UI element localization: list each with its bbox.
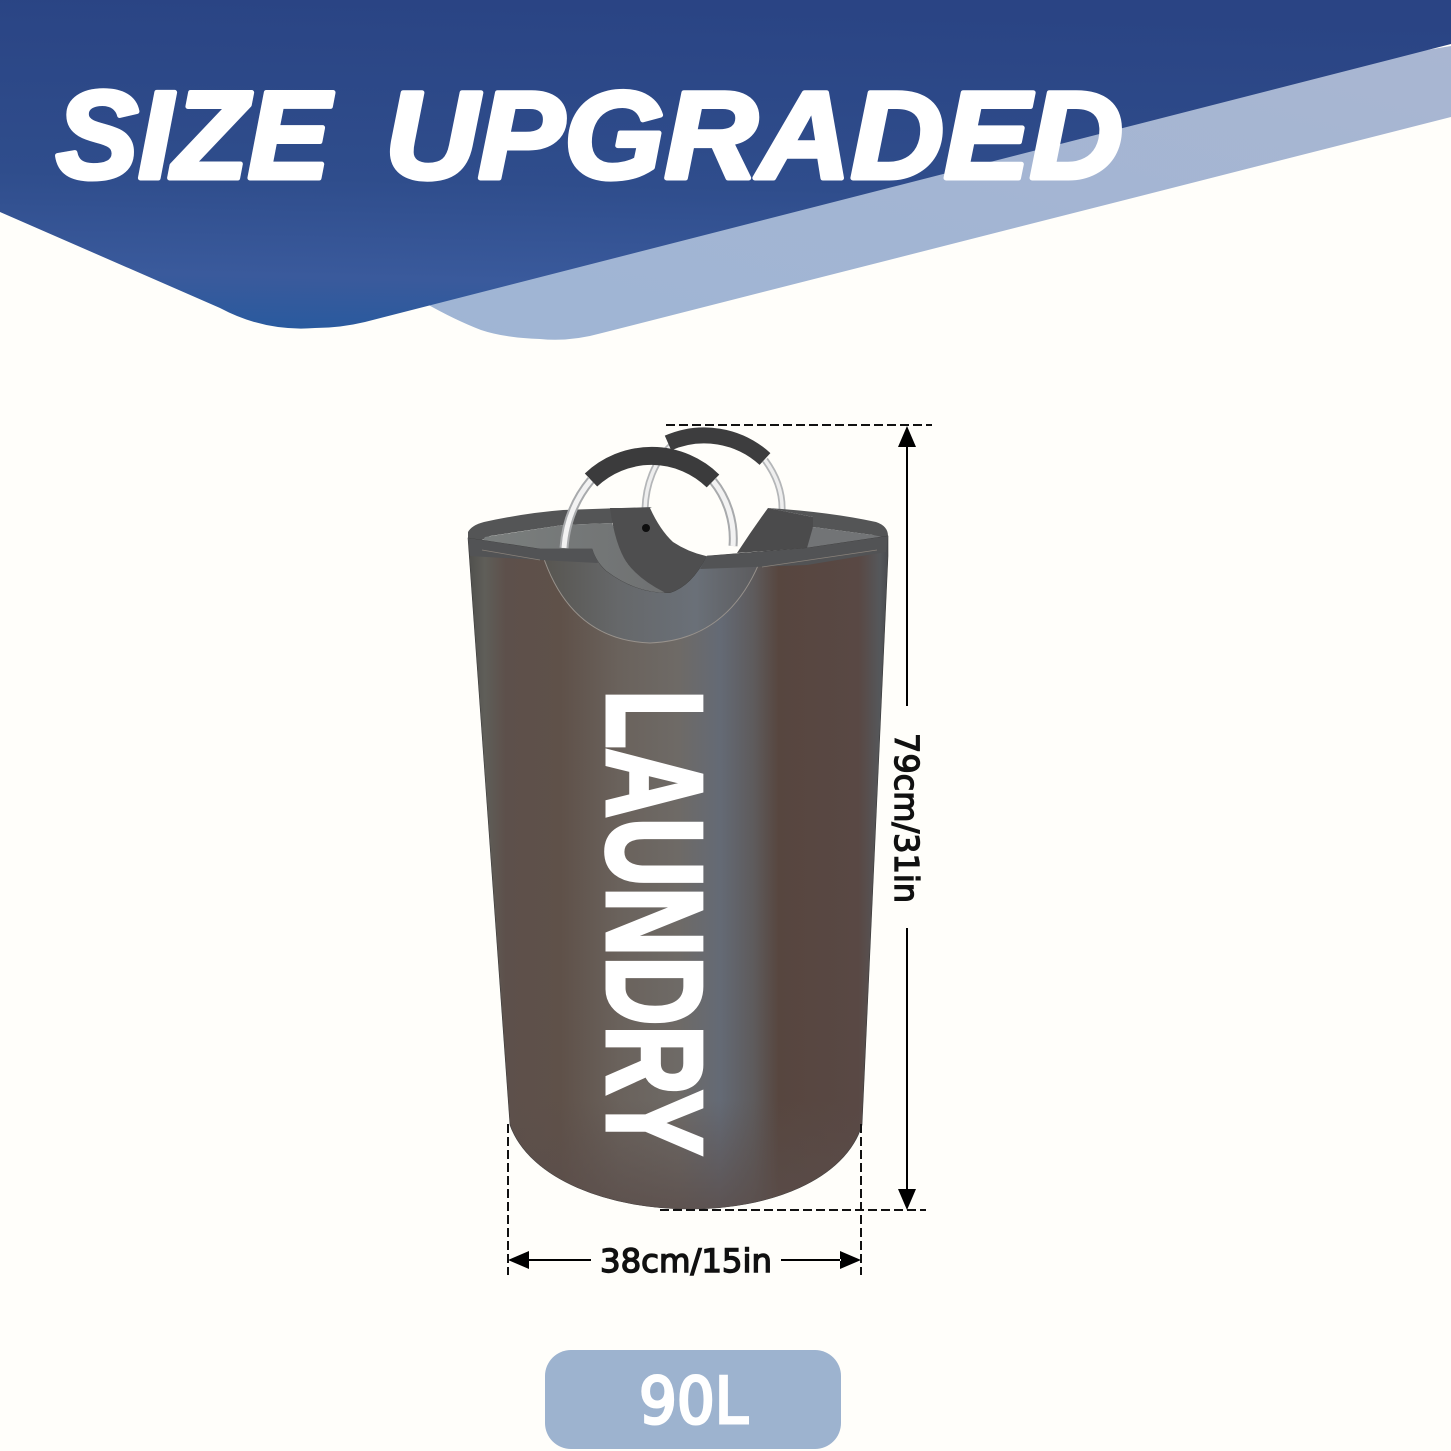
height bottom dashed line <box>660 1209 926 1211</box>
capacity badge <box>545 1350 841 1449</box>
bag interior left <box>478 523 667 600</box>
back handle ring shine <box>645 445 782 512</box>
width label: 38cm/15in <box>600 1242 772 1280</box>
back rim right <box>768 508 888 546</box>
badge background <box>545 1350 841 1449</box>
rim seam <box>482 550 877 567</box>
height arrow top <box>898 426 916 706</box>
capacity text: 90L <box>639 1365 748 1439</box>
back rim left <box>468 507 652 546</box>
header ribbon: light blue band <box>425 46 1451 340</box>
title word: size: SIZE <box>56 67 333 205</box>
height label: 79cm/31in <box>887 733 926 903</box>
body tone overlay <box>526 1126 837 1209</box>
eyelet <box>642 524 650 532</box>
bag body <box>468 536 888 1209</box>
title <box>56 67 1123 205</box>
width arrow right <box>781 1251 861 1269</box>
back tongue left <box>610 508 712 600</box>
front rim band left <box>468 538 598 563</box>
height top dashed line <box>666 424 932 426</box>
width dimension <box>508 1124 861 1280</box>
back handle ring <box>645 445 782 512</box>
front rim band right <box>700 536 888 569</box>
bag interior right <box>800 527 888 552</box>
height arrow bottom <box>898 928 916 1210</box>
laundry bag <box>460 435 896 1212</box>
width left dashed line <box>507 1124 509 1275</box>
front handle grip <box>591 456 713 481</box>
back handle grip <box>668 435 765 459</box>
title word: upgraded: UPGRADED <box>385 67 1123 205</box>
front cuff shading <box>542 549 762 643</box>
front cuff seam <box>542 553 762 643</box>
header ribbon: dark blue <box>0 0 1451 329</box>
back tongue right <box>737 508 813 553</box>
width right dashed line <box>860 1124 862 1275</box>
front handle ring <box>564 480 733 548</box>
bag label text: LAUNDRY <box>579 690 730 1155</box>
front handle ring shine <box>564 480 733 548</box>
width arrow left <box>508 1251 591 1269</box>
height dimension <box>660 425 932 1210</box>
